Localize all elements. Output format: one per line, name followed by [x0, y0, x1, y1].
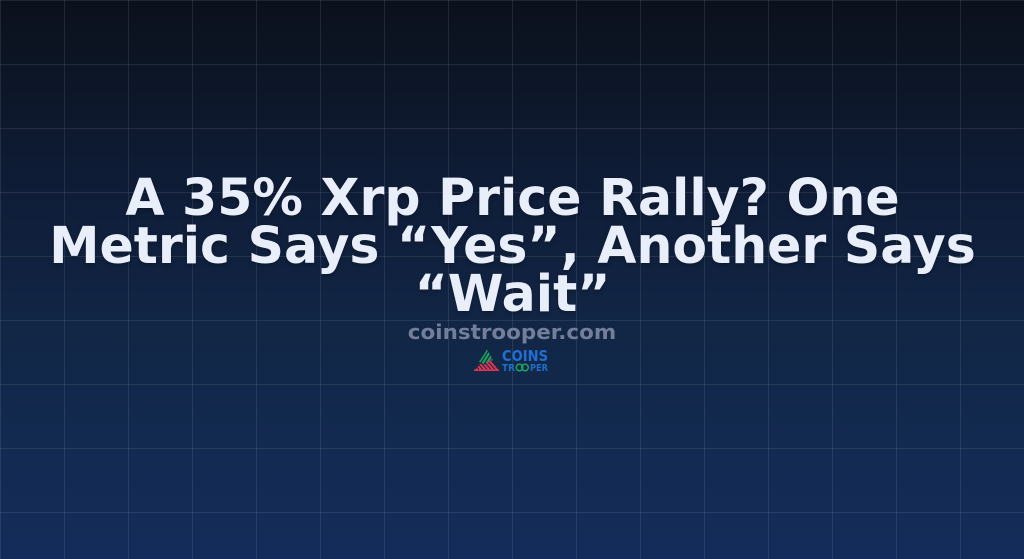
logo: Coins Trooper	[474, 347, 549, 374]
logo wordmark: TR	[502, 363, 516, 374]
logo wordmark	[502, 347, 549, 374]
title	[49, 168, 976, 323]
title: “Wait”	[415, 264, 610, 323]
title: Metric Says “Yes”, Another Says	[49, 216, 976, 275]
logo wordmark: PER	[530, 363, 549, 374]
icon: green and red peaks	[474, 350, 499, 371]
website address: coinstrooper.com	[408, 320, 616, 344]
title: A 35% Xrp Price Rally? One	[125, 168, 900, 227]
